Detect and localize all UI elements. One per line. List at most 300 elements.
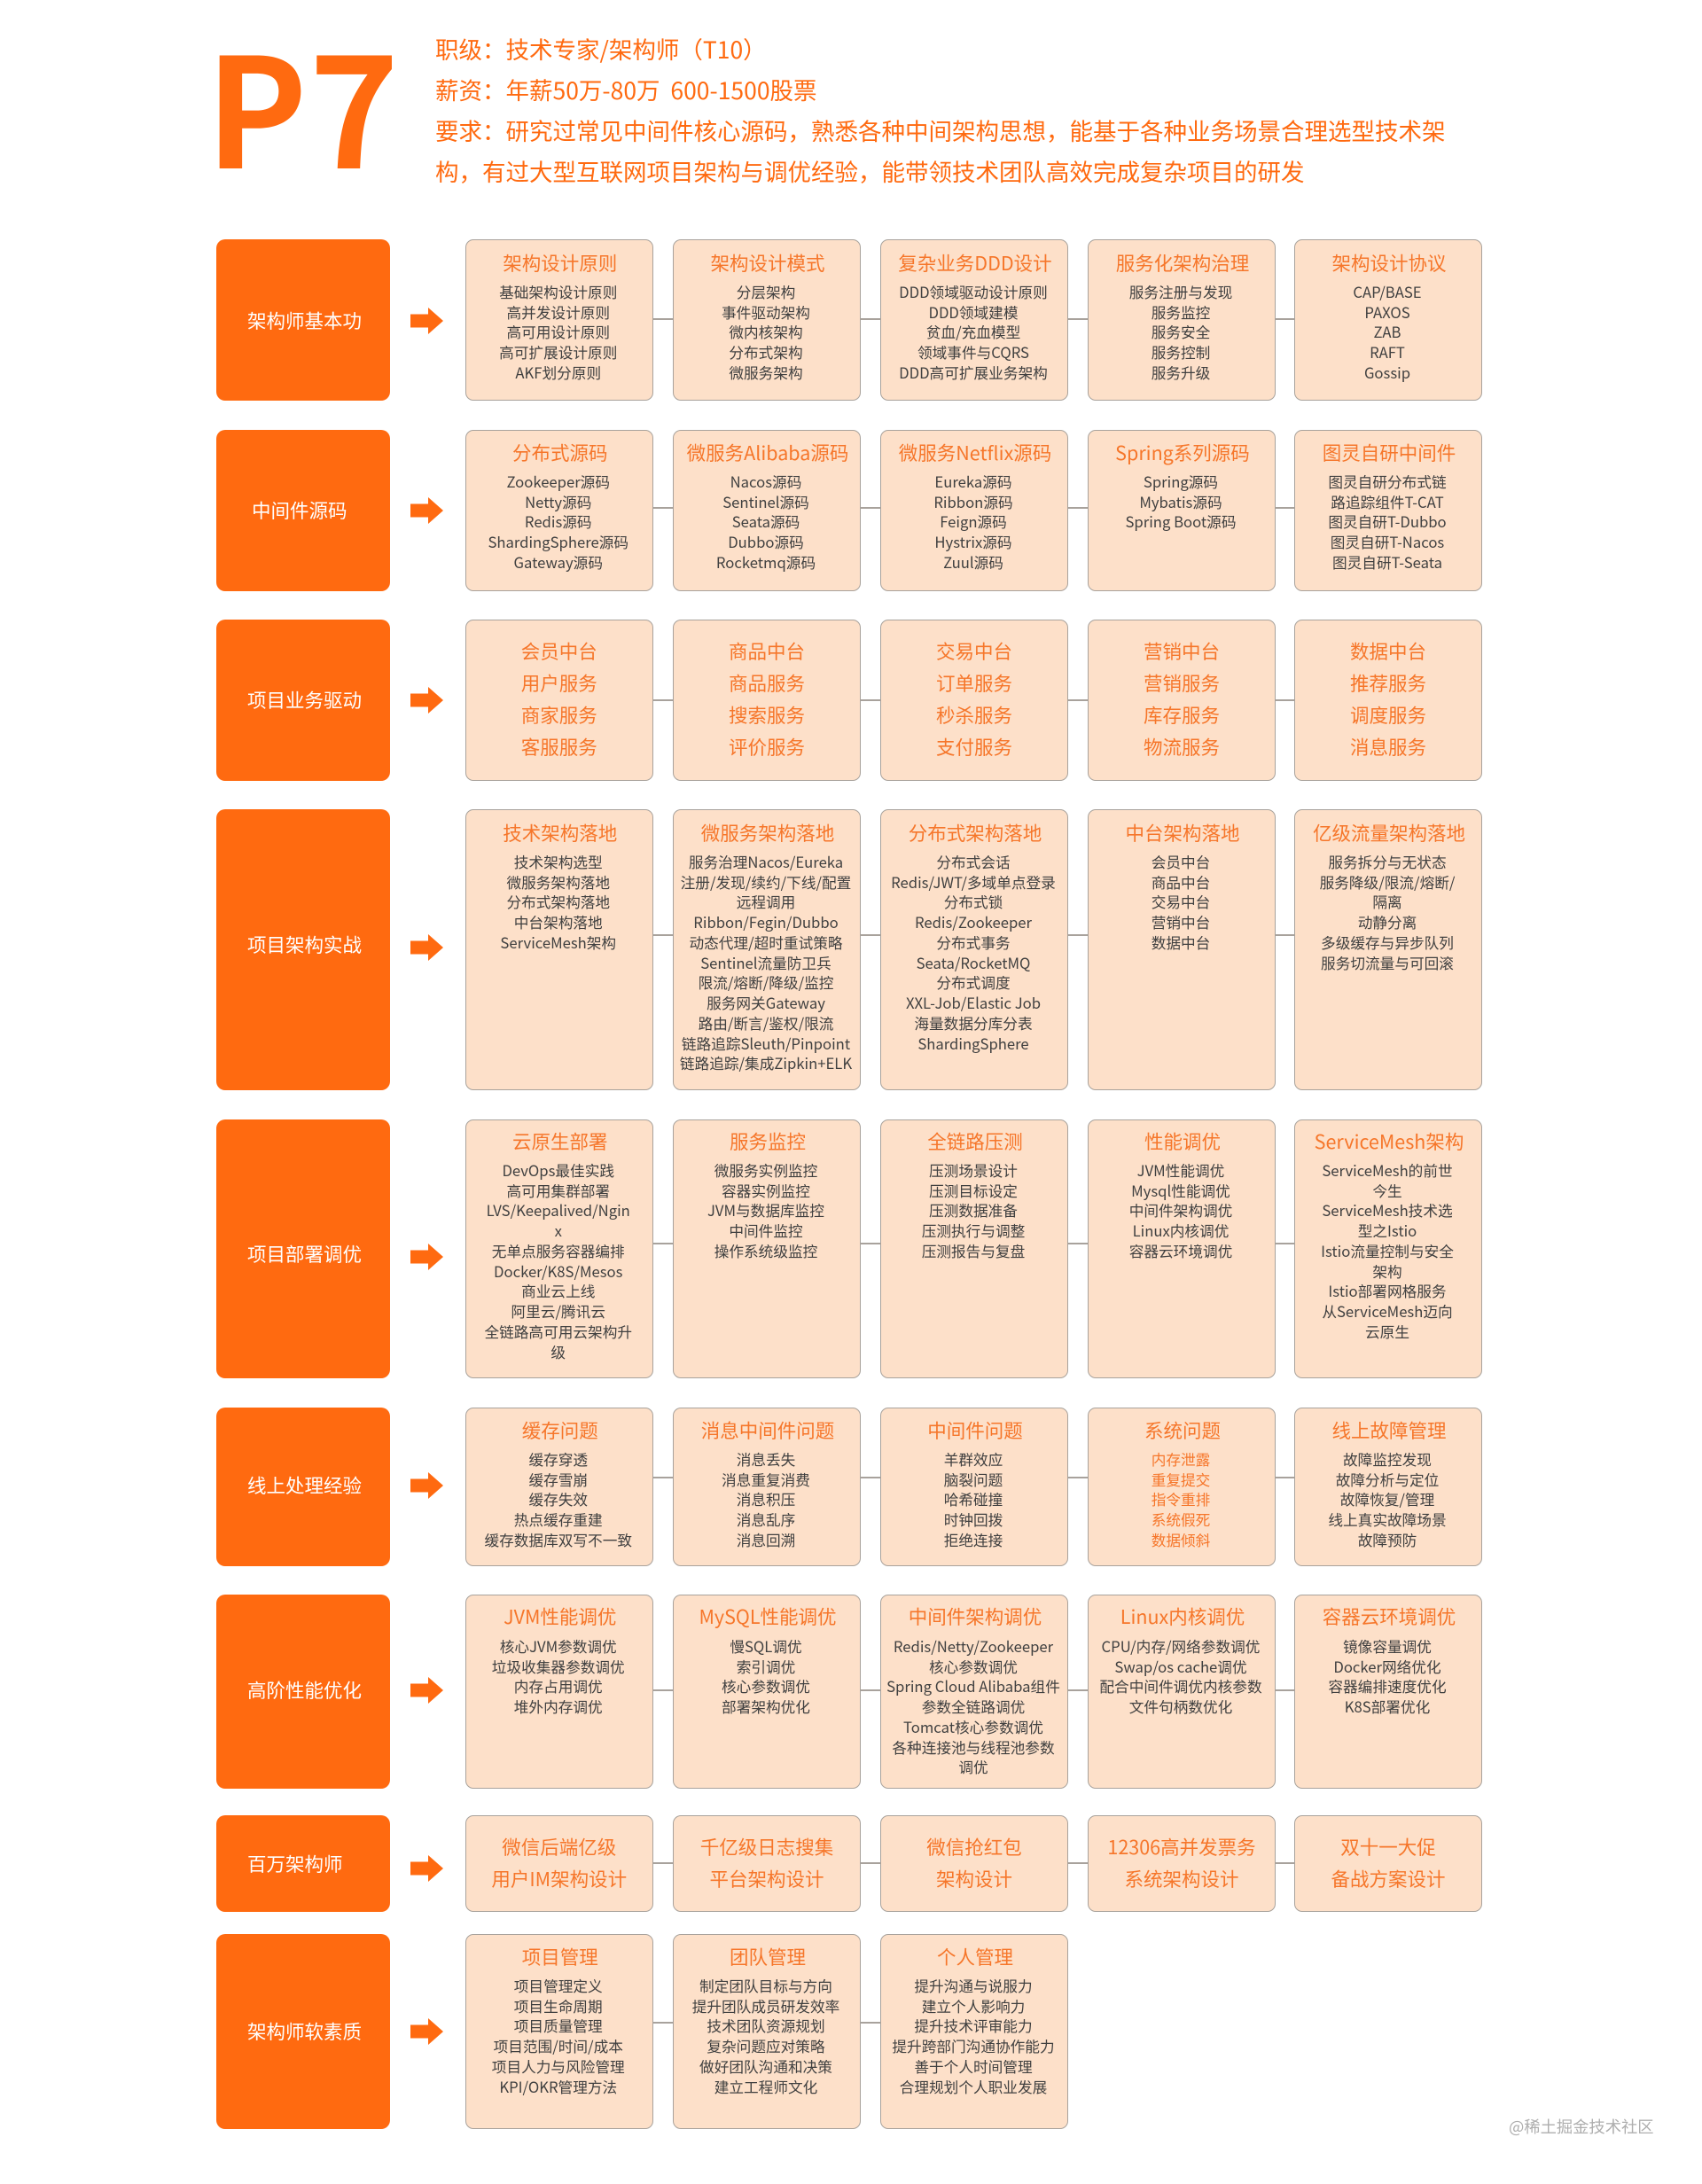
card list: 无单点服务容器编排 — [492, 1240, 625, 1261]
card list: 压测场景设计 — [929, 1159, 1018, 1181]
card list: Redis/JWT/多域单点登录 — [891, 871, 1056, 893]
label: 高阶性能优化: 高阶性能优化 — [247, 1675, 362, 1704]
arrow — [410, 1472, 443, 1499]
card list — [674, 1636, 858, 1717]
card list: 型之Istio — [1358, 1220, 1417, 1241]
card title: ServiceMesh架构 — [1315, 1127, 1464, 1155]
row: 高阶性能优化 — [216, 1595, 1482, 1789]
card: 项目管理 — [465, 1934, 653, 2129]
card list: 合理规划个人职业发展 — [900, 2076, 1047, 2097]
card list: 服务控制 — [1152, 341, 1210, 363]
card list: 复杂问题应对策略 — [707, 2035, 825, 2056]
card list: 容器实例监控 — [722, 1180, 810, 1201]
card text — [466, 1831, 652, 1895]
card list: 架构 — [1372, 1260, 1402, 1282]
card list: 建立工程师文化 — [714, 2076, 817, 2097]
card list: 高并发设计原则 — [506, 301, 610, 323]
card title: 分布式架构落地 — [909, 819, 1042, 846]
card list: 微服务架构落地 — [506, 871, 610, 893]
card: 架构设计原则 — [465, 239, 653, 401]
card list: 图灵自研T-Dubbo — [1328, 511, 1447, 532]
card title: 全链路压测 — [927, 1127, 1023, 1155]
card list: 事件驱动架构 — [722, 301, 810, 323]
card list: Gateway源码 — [514, 551, 603, 573]
card list: 提升沟通与说服力 — [914, 1975, 1033, 1996]
card title: Linux内核调优 — [1120, 1603, 1245, 1630]
row: 项目业务驱动 — [216, 620, 1482, 781]
label: 中间件源码 — [216, 430, 390, 591]
requirements text: 要求：研究过常见中间件核心源码，熟悉各种中间架构思想，能基于各种业务场景合理选型技术架 — [435, 113, 1445, 147]
label: 架构师基本功 — [216, 239, 390, 401]
card title: 云原生部署 — [512, 1127, 608, 1155]
card: Linux内核调优 — [1088, 1595, 1276, 1789]
card: 分布式源码 — [465, 430, 653, 591]
card text — [674, 1831, 860, 1895]
card list: 羊群效应 — [944, 1448, 1003, 1470]
card title: 容器云环境调优 — [1323, 1603, 1456, 1630]
card list — [922, 1159, 1025, 1261]
card list — [881, 1449, 1066, 1550]
card list — [1152, 851, 1210, 953]
card list — [1353, 281, 1422, 383]
card list: Docker网络优化 — [1333, 1656, 1441, 1677]
card: 数据中台 — [1294, 620, 1482, 781]
card list: 微内核架构 — [729, 321, 803, 342]
card list: 会员中台 — [1152, 851, 1210, 872]
arrow — [410, 1244, 443, 1270]
card title: 技术架构落地 — [503, 819, 617, 846]
card list: 故障监控发现 — [1343, 1448, 1432, 1470]
card list — [1126, 471, 1236, 532]
card list: 微服务实例监控 — [714, 1159, 817, 1181]
card text: 系统架构设计 — [1124, 1865, 1239, 1892]
card list: Nacos源码 — [730, 471, 801, 492]
card list: ZAB — [1374, 321, 1401, 342]
card list: 项目管理定义 — [514, 1975, 603, 1996]
card list: 全链路高可用云架构升 — [484, 1321, 632, 1342]
card list: 限流/熔断/降级/监控 — [699, 971, 833, 993]
card text: 平台架构设计 — [709, 1865, 824, 1892]
card list: XXL-Job/Elastic Job — [906, 992, 1041, 1013]
card list: DDD领域建模 — [928, 301, 1018, 323]
card list: ShardingSphere源码 — [488, 531, 628, 552]
card title: 架构设计协议 — [1331, 249, 1447, 277]
card list: 压测报告与复盘 — [922, 1240, 1025, 1261]
card list: 重复提交 — [1152, 1469, 1210, 1490]
card list: 贫血/充血模型 — [926, 321, 1020, 342]
card title: 微服务Alibaba源码 — [687, 439, 848, 466]
card: 个人管理 — [880, 1934, 1068, 2129]
card list: 容器编排速度优化 — [1328, 1675, 1447, 1696]
card list: PAXOS — [1364, 301, 1410, 323]
card list — [674, 1449, 858, 1550]
card text — [729, 636, 805, 760]
card list: 参数全链路调优 — [922, 1696, 1025, 1717]
card text: 商品中台 — [729, 636, 805, 665]
card: 复杂业务DDD设计 — [880, 239, 1068, 401]
card title: 微服务架构落地 — [701, 819, 834, 846]
card list: Seata源码 — [732, 511, 800, 532]
card list: Gossip — [1364, 362, 1410, 383]
card list: 哈希碰撞 — [944, 1488, 1003, 1509]
card: 团队管理 — [673, 1934, 861, 2129]
card list: 各种连接池与线程池参数 — [892, 1736, 1055, 1758]
card list: 索引调优 — [737, 1656, 795, 1677]
card list: 图灵自研T-Seata — [1332, 551, 1442, 573]
arrow — [410, 497, 443, 524]
card text: 营销服务 — [1144, 668, 1220, 697]
card list: 镜像容量调优 — [1343, 1635, 1432, 1657]
card list: 分布式架构落地 — [506, 891, 610, 912]
card title: 微服务Netflix源码 — [899, 439, 1051, 466]
label: 项目业务驱动: 项目业务驱动 — [247, 686, 362, 714]
card: 千亿级日志搜集 — [673, 1815, 861, 1912]
card text: 支付服务 — [936, 732, 1012, 760]
card title: Spring系列源码 — [1115, 439, 1250, 466]
card list: 商业云上线 — [521, 1280, 595, 1301]
label: 中间件源码: 中间件源码 — [252, 496, 347, 524]
card text: 用户IM架构设计 — [491, 1865, 627, 1892]
card list: 分布式锁 — [944, 891, 1003, 912]
card list: Sentinel源码 — [722, 491, 809, 512]
card list: Tomcat核心参数调优 — [903, 1716, 1043, 1737]
label: 项目部署调优: 项目部署调优 — [247, 1240, 362, 1268]
card list — [1089, 1636, 1273, 1717]
card text: 库存服务 — [1144, 700, 1220, 729]
card list: ServiceMesh技术选 — [1322, 1199, 1453, 1221]
card text — [1144, 636, 1220, 760]
card list: 中间件监控 — [729, 1220, 803, 1241]
card list: 线上真实故障场景 — [1328, 1509, 1447, 1530]
card list — [466, 1636, 651, 1717]
card list — [899, 281, 1048, 383]
card title: 亿级流量架构落地 — [1313, 819, 1465, 846]
card text: 会员中台 — [521, 636, 597, 665]
card list: LVS/Keepalived/Ngin — [487, 1199, 630, 1221]
card list: 时钟回拨 — [944, 1509, 1003, 1530]
card text: 千亿级日志搜集 — [700, 1833, 833, 1860]
row: 架构师基本功 — [216, 239, 1482, 401]
card list: 服务安全 — [1152, 321, 1210, 342]
card: 性能调优 — [1088, 1119, 1276, 1378]
card list: AKF划分原则 — [515, 362, 601, 383]
card list: Sentinel流量防卫兵 — [700, 952, 831, 973]
card list: 内存占用调优 — [514, 1675, 603, 1696]
card list: 部署架构优化 — [722, 1696, 810, 1717]
card list: Seata/RocketMQ — [917, 952, 1030, 973]
card list: 微服务架构 — [729, 362, 803, 383]
card: 微服务架构落地 — [673, 809, 861, 1090]
card list: Docker/K8S/Mesos — [494, 1260, 622, 1282]
card list: 核心参数调优 — [722, 1675, 810, 1696]
card list: 系统假死 — [1152, 1509, 1210, 1530]
card list: 服务降级/限流/熔断/ — [1320, 871, 1455, 893]
card title: 线上故障管理 — [1331, 1416, 1447, 1444]
card title: 服务化架构治理 — [1116, 249, 1249, 277]
card list: CPU/内存/网络参数调优 — [1102, 1635, 1260, 1657]
card list: 分层架构 — [737, 281, 795, 302]
card list — [1089, 1449, 1273, 1550]
card list: 压测数据准备 — [929, 1199, 1018, 1221]
card list: 项目质量管理 — [514, 2015, 603, 2036]
card list: 高可用集群部署 — [506, 1180, 610, 1201]
card title: 服务监控 — [730, 1127, 806, 1155]
card list: 领域事件与CQRS — [917, 341, 1029, 363]
card list: 服务监控 — [1152, 301, 1210, 323]
card list — [484, 1448, 632, 1550]
card list: 中台架构落地 — [514, 911, 603, 932]
card list: 消息回溯 — [737, 1529, 795, 1550]
card list: 项目生命周期 — [514, 1995, 603, 2016]
row: 架构师软素质 — [216, 1934, 1482, 2129]
card: 服务监控 — [673, 1119, 861, 1378]
card title: 中间件架构调优 — [909, 1603, 1042, 1630]
card: 营销中台 — [1088, 620, 1276, 781]
card: 亿级流量架构落地 — [1294, 809, 1482, 1090]
card list: Spring源码 — [1144, 471, 1218, 492]
card list: 调优 — [958, 1756, 988, 1777]
card list: Netty源码 — [525, 491, 591, 512]
card list: 核心参数调优 — [929, 1656, 1018, 1677]
arrow — [410, 2018, 443, 2045]
card list: 建立个人影响力 — [922, 1995, 1025, 2016]
card list — [1295, 1449, 1479, 1550]
level line: 职级：技术专家/架构师（T10） — [435, 31, 767, 66]
card: 商品中台 — [673, 620, 861, 781]
card list: ServiceMesh架构 — [500, 932, 616, 953]
card text: 数据中台 — [1350, 636, 1426, 665]
card title: 性能调优 — [1144, 1127, 1221, 1155]
card title: 个人管理 — [937, 1943, 1013, 1970]
label: 高阶性能优化 — [216, 1595, 390, 1789]
card list: 缓存失效 — [528, 1488, 588, 1509]
card list: KPI/OKR管理方法 — [499, 2076, 617, 2097]
card list — [716, 471, 816, 573]
card list: 级 — [550, 1341, 566, 1362]
card: 缓存问题 — [465, 1408, 653, 1566]
card list: 路由/断言/鉴权/限流 — [699, 1012, 833, 1034]
card list: 缓存雪崩 — [528, 1469, 588, 1490]
card list: x — [555, 1220, 562, 1241]
card list: 路追踪组件T-CAT — [1331, 491, 1444, 512]
card text: 交易中台 — [936, 636, 1012, 665]
card list: 提升团队成员研发效率 — [692, 1995, 839, 2016]
label: 架构师软素质 — [216, 1934, 390, 2129]
card title: 消息中间件问题 — [701, 1416, 834, 1444]
card list: 服务治理Nacos/Eureka — [689, 851, 843, 872]
card list: 链路追踪Sleuth/Pinpoint — [682, 1033, 850, 1054]
card: 会员中台 — [465, 620, 653, 781]
card list: 营销中台 — [1152, 911, 1210, 932]
card text — [1295, 1831, 1481, 1895]
card list: 核心JVM参数调优 — [500, 1635, 617, 1657]
card list: 消息积压 — [737, 1488, 795, 1509]
card title: 缓存问题 — [522, 1416, 598, 1444]
card list: Istio部署网格服务 — [1328, 1280, 1447, 1301]
arrow — [410, 1854, 443, 1881]
card list: 内存泄露 — [1152, 1448, 1210, 1470]
card: 系统问题 — [1088, 1408, 1276, 1566]
card title: 系统问题 — [1144, 1416, 1221, 1444]
card list: 脑裂问题 — [944, 1469, 1003, 1490]
row: 中间件源码 — [216, 430, 1482, 591]
card: 12306高并发票务 — [1088, 1815, 1276, 1912]
card list: Mybatis源码 — [1139, 491, 1222, 512]
card list — [881, 1976, 1066, 2096]
card list: Linux内核调优 — [1133, 1220, 1229, 1241]
card: 架构设计模式 — [673, 239, 861, 401]
requirements text: 构，有过大型互联网项目架构与调优经验，能带领技术团队高效完成复杂项目的研发 — [435, 153, 1305, 188]
card list: 阿里云/腾讯云 — [511, 1300, 605, 1322]
card list: 分布式调度 — [936, 971, 1011, 993]
card list: 消息丢失 — [737, 1448, 795, 1470]
card list: 商品中台 — [1152, 871, 1210, 893]
card list: ShardingSphere — [917, 1033, 1029, 1054]
card list: 交易中台 — [1152, 891, 1210, 912]
card list: Dubbo源码 — [728, 531, 804, 552]
card text: 搜索服务 — [729, 700, 805, 729]
card list — [1129, 281, 1232, 383]
card list: 分布式事务 — [936, 932, 1011, 953]
card text: 物流服务 — [1144, 732, 1220, 760]
card: 双十一大促 — [1294, 1815, 1482, 1912]
card: 中间件问题 — [880, 1408, 1068, 1566]
card list — [1321, 1159, 1454, 1342]
card list: K8S部署优化 — [1345, 1696, 1430, 1717]
card list: 数据倾斜 — [1152, 1529, 1210, 1550]
card list: 项目范围/时间/成本 — [494, 2035, 623, 2056]
card text: 订单服务 — [936, 668, 1012, 697]
card list: Rocketmq源码 — [716, 551, 816, 573]
card: MySQL性能调优 — [673, 1595, 861, 1789]
arrow — [410, 687, 443, 714]
arrow — [410, 308, 443, 334]
label: 项目业务驱动 — [216, 620, 390, 781]
card: ServiceMesh架构 — [1294, 1119, 1482, 1378]
row: 项目架构实战 — [216, 809, 1482, 1090]
row: 项目部署调优 — [216, 1119, 1482, 1378]
card: 云原生部署 — [465, 1119, 653, 1378]
card: 技术架构落地 — [465, 809, 653, 1090]
card: JVM性能调优 — [465, 1595, 653, 1789]
card list — [707, 1159, 824, 1261]
card list: Redis源码 — [525, 511, 592, 532]
card list — [1129, 1159, 1232, 1261]
card list: 提升跨部门沟通协作能力 — [892, 2035, 1055, 2056]
card list: 服务拆分与无状态 — [1328, 851, 1447, 872]
card text: 评价服务 — [729, 732, 805, 760]
card list — [1320, 851, 1456, 973]
card list — [466, 1976, 651, 2096]
card list: Zuul源码 — [943, 551, 1003, 573]
card list: 容器云环境调优 — [1129, 1240, 1232, 1261]
card list: 高可扩展设计原则 — [499, 341, 617, 363]
card list: RAFT — [1370, 341, 1405, 363]
card list: ServiceMesh的前世 — [1322, 1159, 1453, 1181]
card title: 中台架构落地 — [1125, 819, 1239, 846]
card list: Swap/os cache调优 — [1114, 1656, 1247, 1677]
card list: 注册/发现/续约/下线/配置 — [681, 871, 851, 893]
card list: 缓存数据库双写不一致 — [484, 1529, 632, 1550]
card list: Eureka源码 — [934, 471, 1012, 492]
card list — [933, 471, 1013, 573]
card text: 消息服务 — [1350, 732, 1426, 760]
card list: 提升技术评审能力 — [914, 2015, 1033, 2036]
card list — [881, 1636, 1066, 1777]
card list: DevOps最佳实践 — [502, 1159, 614, 1181]
label: 项目架构实战: 项目架构实战 — [247, 931, 362, 957]
card list — [500, 851, 616, 953]
card: 架构设计协议 — [1294, 239, 1482, 401]
card list: 慢SQL调优 — [730, 1635, 802, 1657]
card list: DDD领域驱动设计原则 — [899, 281, 1048, 302]
card text: 备战方案设计 — [1331, 1865, 1445, 1892]
card text: 秒杀服务 — [936, 700, 1012, 729]
card list: 动静分离 — [1358, 911, 1417, 932]
card list: 基础架构设计原则 — [499, 281, 617, 302]
card text: 架构设计 — [936, 1865, 1012, 1892]
card list: Mysql性能调优 — [1131, 1180, 1230, 1201]
card list: 动态代理/超时重试策略 — [689, 932, 843, 953]
label: 百万架构师: 百万架构师 — [247, 1849, 343, 1877]
card list: 服务切流量与可回滚 — [1321, 952, 1454, 973]
card list: DDD高可扩展业务架构 — [899, 362, 1048, 383]
card text: 用户服务 — [521, 668, 597, 697]
card list: 故障恢复/管理 — [1340, 1488, 1434, 1509]
card title: 复杂业务DDD设计 — [898, 249, 1052, 277]
card list — [499, 281, 617, 383]
card title: 图灵自研中间件 — [1323, 439, 1456, 466]
card list: 消息乱序 — [737, 1509, 795, 1530]
card list: 今生 — [1372, 1180, 1402, 1201]
arrow — [410, 1677, 443, 1704]
card list — [674, 1976, 858, 2096]
card list: 图灵自研分布式链 — [1328, 471, 1447, 492]
card: 图灵自研中间件 — [1294, 430, 1482, 591]
card title: 分布式源码 — [512, 439, 608, 466]
row: 百万架构师 — [216, 1815, 1482, 1912]
card list: 热点缓存重建 — [514, 1509, 603, 1530]
label: 百万架构师 — [216, 1815, 390, 1912]
card title: 团队管理 — [730, 1943, 806, 1970]
label: 架构师基本功: 架构师基本功 — [247, 307, 362, 334]
card list — [891, 851, 1056, 1054]
card text — [521, 636, 597, 760]
card list: 中间件架构调优 — [1129, 1199, 1232, 1221]
card list: 项目人力与风险管理 — [492, 2055, 625, 2077]
card list: 压测执行与调整 — [922, 1220, 1025, 1241]
card list: 文件句柄数优化 — [1129, 1696, 1232, 1717]
card list — [488, 471, 628, 573]
card title: 架构设计模式 — [710, 249, 824, 277]
card: 全链路压测 — [880, 1119, 1068, 1378]
card list: 分布式架构 — [729, 341, 803, 363]
label: 项目部署调优 — [216, 1119, 390, 1378]
card text — [936, 636, 1012, 760]
card list: Redis/Zookeeper — [915, 911, 1032, 932]
card list: 从ServiceMesh迈向 — [1322, 1300, 1453, 1322]
card: 中间件架构调优 — [880, 1595, 1068, 1789]
card: 微服务Netflix源码 — [880, 430, 1068, 591]
card list: JVM与数据库监控 — [707, 1199, 824, 1221]
card list: 制定团队目标与方向 — [699, 1975, 832, 1996]
card list — [484, 1159, 632, 1362]
card list: 缓存穿透 — [528, 1448, 588, 1470]
card list — [722, 281, 810, 383]
card: 容器云环境调优 — [1294, 1595, 1482, 1789]
card title: 项目管理 — [522, 1943, 598, 1970]
requirements text — [435, 113, 1445, 188]
